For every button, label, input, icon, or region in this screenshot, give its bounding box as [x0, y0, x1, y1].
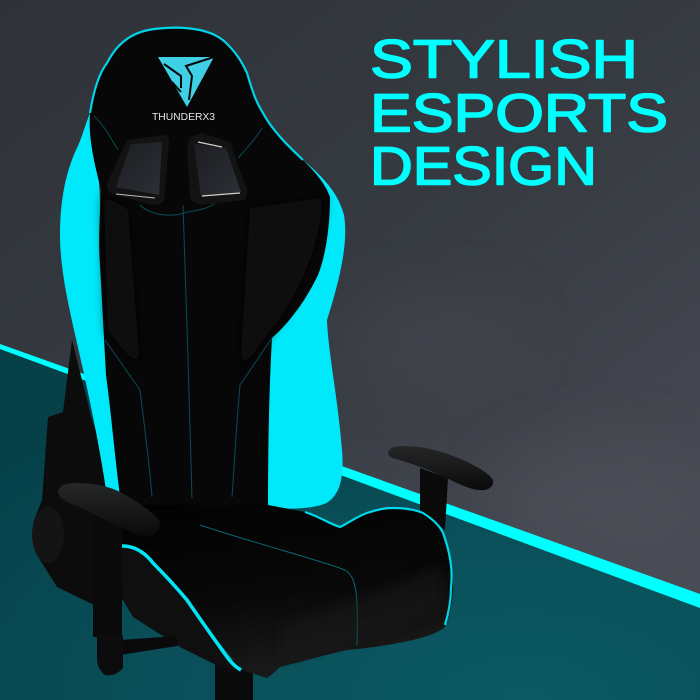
left armrest pad	[58, 483, 160, 536]
headline	[370, 30, 668, 196]
right armrest post	[420, 468, 448, 530]
right cyan seat piping	[305, 508, 452, 625]
left cyan seat piping	[122, 546, 241, 670]
gaming chair	[32, 28, 493, 700]
backrest and headrest	[90, 28, 330, 510]
headline line 1: STYLISH	[370, 30, 638, 90]
recline knob	[32, 507, 64, 563]
headline line 3: DESIGN	[370, 136, 597, 196]
left armrest foot	[97, 635, 123, 675]
seat stitching	[200, 525, 357, 645]
seat side panel	[122, 548, 237, 670]
seat highlight	[280, 565, 445, 660]
seat cushion	[118, 505, 453, 678]
logo solid shape	[158, 57, 214, 107]
teal floor	[0, 347, 700, 700]
backrest side panels	[104, 195, 322, 372]
logo cut lines	[164, 57, 214, 100]
gas lift column	[215, 660, 253, 700]
right armrest pad	[388, 446, 493, 490]
recline mechanism bracket	[33, 340, 125, 604]
glowing cyan floor line	[0, 344, 700, 608]
backrest stitching	[94, 116, 272, 498]
right headrest opening	[187, 133, 247, 205]
headline line 2: ESPORTS	[370, 84, 668, 144]
brand logo	[158, 57, 214, 107]
brand wordmark: THUNDERX3	[152, 112, 215, 123]
left headrest opening	[107, 135, 169, 205]
cyan headrest piping	[90, 28, 303, 160]
left cyan side wing	[60, 113, 122, 492]
base strut	[120, 636, 177, 655]
left armrest post	[93, 515, 122, 637]
right cyan side wing	[263, 113, 345, 509]
